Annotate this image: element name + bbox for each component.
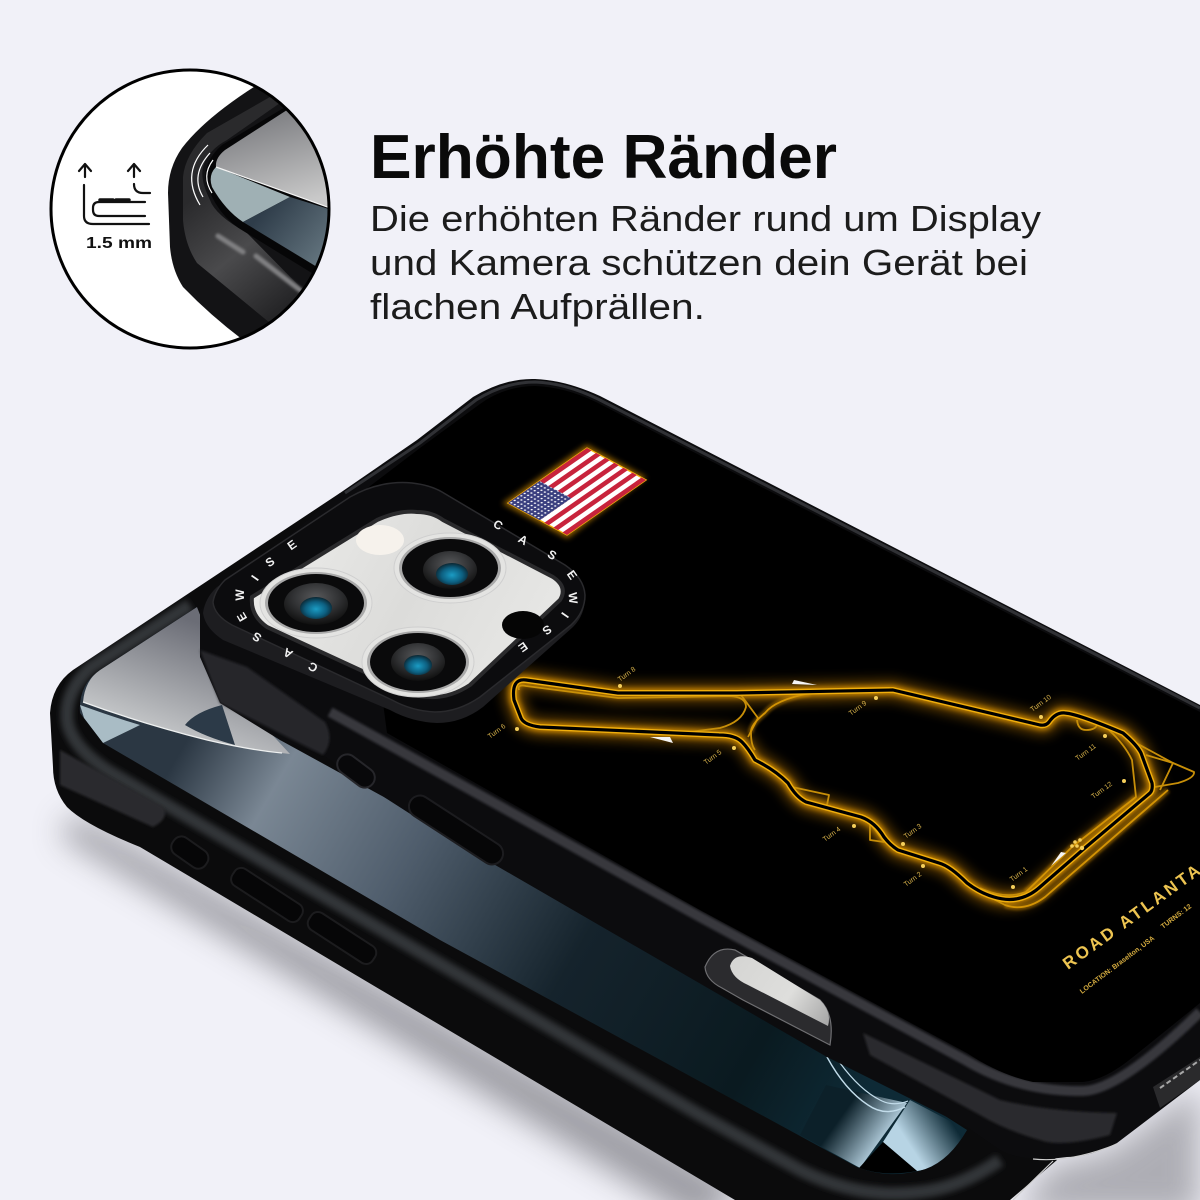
turn markers — [515, 684, 1126, 889]
circular detail inset — [51, 70, 345, 348]
CASEWISE ring lettering: I — [248, 573, 262, 583]
track wide glow — [514, 680, 1152, 899]
lens: left — [260, 568, 372, 638]
corner screen mid — [211, 167, 290, 222]
lens: top right — [394, 533, 506, 603]
turn labels: Turn 12 — [1090, 781, 1114, 801]
turn labels: Turn 1 — [1009, 866, 1029, 883]
CASEWISE ring lettering: W — [566, 592, 581, 605]
turn labels: Turn 3 — [903, 823, 923, 840]
CASEWISE ring lettering: E — [234, 610, 250, 624]
drop shadow under phone — [60, 815, 1200, 1200]
CASEWISE ring lettering: S — [545, 547, 559, 563]
flag body — [508, 448, 646, 535]
turn labels: Turn 11 — [1075, 743, 1098, 762]
CASEWISE ring lettering: C — [491, 517, 506, 533]
CASEWISE ring lettering: S — [250, 629, 264, 645]
screen curve line — [83, 702, 282, 753]
CASEWISE ring lettering: W — [233, 589, 247, 601]
lidar hole — [502, 611, 544, 639]
camera side textured patch — [200, 650, 330, 755]
flare arcs — [827, 1057, 908, 1112]
bottom silver edge — [1013, 1144, 1117, 1200]
long side button — [405, 791, 507, 869]
flare black wedge — [859, 1142, 917, 1173]
flare left ray — [810, 1088, 907, 1168]
flare right ray — [883, 1100, 967, 1171]
volume down button — [305, 909, 379, 967]
case outer body — [50, 493, 1057, 1200]
corner side sheen — [183, 97, 303, 323]
bump base side — [203, 484, 585, 723]
screen gradient — [60, 590, 990, 1190]
reflection line — [216, 167, 330, 208]
turn labels: Turn 9 — [848, 700, 868, 717]
CASEWISE ring lettering: I — [558, 610, 572, 620]
race track map — [487, 666, 1200, 996]
bump top ring — [213, 483, 585, 712]
camera bump — [203, 483, 585, 723]
circuit turns: TURNS: 12 — [1160, 903, 1193, 931]
CASEWISE ring lettering: S — [263, 554, 277, 570]
CASEWISE ring lettering — [233, 517, 581, 675]
pale wedge — [80, 705, 140, 743]
case sheen highlight — [218, 236, 300, 290]
camera window — [252, 512, 563, 697]
charging port surround — [705, 949, 831, 1045]
USA flag — [508, 448, 646, 535]
back panel — [330, 386, 1200, 1082]
turn labels: Turn 5 — [703, 749, 723, 766]
inset phone corner photo — [168, 87, 328, 338]
CASEWISE ring lettering: A — [280, 645, 295, 661]
turn labels: Turn 2 — [903, 871, 923, 888]
track yellow band — [514, 680, 1152, 899]
small ring button — [333, 750, 379, 792]
CASEWISE ring lettering: E — [564, 568, 580, 582]
impact arcs — [192, 145, 213, 205]
white reflections — [650, 680, 1066, 866]
CASEWISE ring lettering: S — [540, 622, 554, 638]
corner screen lower — [243, 197, 328, 266]
case rim highlight — [60, 605, 1000, 1194]
phone screen visible between cases — [60, 590, 990, 1190]
heading: Erhöhte Ränder — [370, 123, 837, 192]
action button — [168, 833, 212, 872]
lens: bottom — [362, 627, 474, 697]
description text: flachen Aufprällen. — [370, 286, 705, 327]
secondary track lines — [519, 686, 1194, 907]
turn labels: Turn 8 — [617, 666, 637, 683]
upper phone case — [200, 379, 1200, 1200]
case rim highlights — [330, 382, 1200, 1143]
track secondary glow — [751, 693, 1168, 907]
turn labels: Turn 4 — [822, 826, 842, 843]
track near glow — [514, 680, 1152, 899]
corner screen top — [216, 110, 328, 206]
flag glow — [508, 448, 641, 535]
description text: und Kamera schützen dein Gerät bei — [370, 242, 1028, 283]
charging port silver — [730, 956, 829, 1026]
inset disc — [51, 70, 329, 348]
circuit location: LOCATION: Braselton, USA — [1079, 935, 1156, 996]
screen grey top area — [83, 607, 290, 754]
turn labels: Turn 6 — [487, 723, 507, 740]
corner case outer — [168, 87, 312, 338]
corner inner bezel — [205, 108, 328, 273]
track black centreline — [514, 680, 1152, 899]
CASEWISE ring lettering: A — [516, 532, 531, 548]
navy blob — [185, 705, 235, 745]
description text — [370, 198, 1041, 327]
CASEWISE ring lettering: E — [285, 537, 299, 553]
turn labels — [487, 666, 1114, 888]
raised edge diagram icon — [79, 164, 150, 224]
volume up button — [228, 865, 306, 925]
lower phone case — [50, 493, 1057, 1200]
CASEWISE ring lettering: E — [516, 639, 530, 655]
thickness label: 1.5 mm — [86, 235, 152, 252]
inset ring — [51, 70, 329, 348]
flash — [356, 525, 404, 555]
turn labels: Turn 10 — [1029, 694, 1053, 714]
description text: Die erhöhten Ränder rund um Display — [370, 198, 1041, 239]
case body — [200, 379, 1200, 1159]
CASEWISE ring lettering: C — [305, 659, 320, 675]
